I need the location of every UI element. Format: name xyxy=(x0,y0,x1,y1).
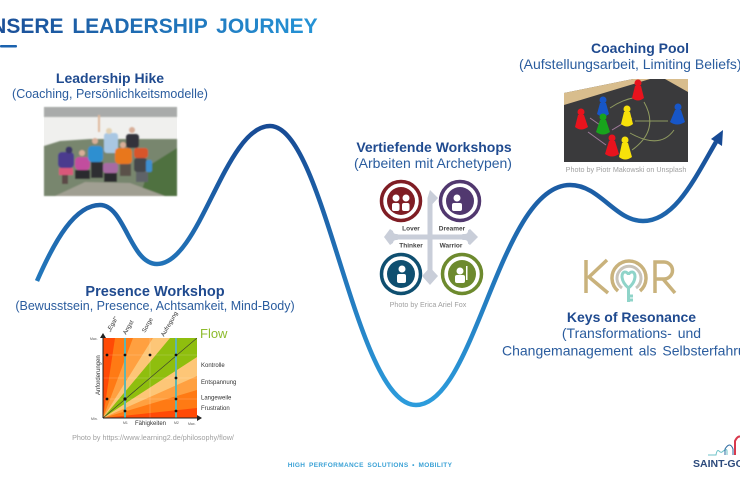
heading: Coaching Pool: Coaching Pool xyxy=(591,40,689,56)
heading: Keys of Resonance: Keys of Resonance xyxy=(567,309,696,325)
label box: Dreamer xyxy=(436,222,468,234)
heading: Leadership Hike: Leadership Hike xyxy=(56,70,164,86)
journey curve arrow xyxy=(37,126,723,405)
logo: Saint-Gobain xyxy=(693,436,740,470)
subtext: Leadership Hike: (Coaching, Persönlichkeitsmodelle) xyxy=(12,87,208,101)
photo: hiking group xyxy=(44,107,177,196)
subtext: Presence Workshop: (Bewusstsein, Presence, Achtsamkeit, Mind-Body) xyxy=(15,299,295,313)
flow chart: „Egal" xyxy=(107,316,120,333)
flow chart: M1 xyxy=(123,421,128,425)
flow chart: Aufregung xyxy=(161,311,180,338)
caption: archetypes: Photo by Erica Ariel Fox xyxy=(390,300,467,309)
flow chart: Fähigkeiten xyxy=(135,421,166,427)
footer tagline: HIGH PERFORMANCE SOLUTIONS • MOBILITY xyxy=(288,462,453,469)
archetype diagram: Warrior xyxy=(440,242,463,250)
flow chart: Frustration xyxy=(201,406,230,412)
flow chart: Anforderungen xyxy=(96,355,102,395)
flow chart: Kontrolle xyxy=(201,363,225,369)
flow chart: Langeweile xyxy=(201,396,232,402)
flow chart: Angst xyxy=(123,319,136,336)
caption: flow chart: Photo by https://www.learning2.de/philosophy/flow/ xyxy=(72,433,234,442)
title underline xyxy=(0,45,17,48)
label box: Warrior xyxy=(436,240,468,251)
icon: Dreamer xyxy=(440,182,480,220)
flow chart: Entspannung xyxy=(201,380,236,386)
archetype diagram xyxy=(382,182,482,294)
flow chart: Sorge xyxy=(142,317,155,334)
caption: game pieces: Photo by Piotr Makowski on Unsplash xyxy=(566,165,686,174)
icon: Lover xyxy=(382,182,420,220)
flow chart: Min. xyxy=(91,417,98,421)
logo: KOR key xyxy=(586,260,675,302)
heading: Vertiefende Workshops: Vertiefende Workshops xyxy=(356,139,512,155)
label box: Thinker xyxy=(393,240,425,251)
flow chart: M2 xyxy=(174,421,179,425)
label box: Lover xyxy=(393,222,425,234)
subtext: Keys of Resonance line 1: (Transformations- und xyxy=(562,325,701,341)
flow chart: Max. xyxy=(188,422,196,426)
archetype diagram: Dreamer xyxy=(439,226,466,232)
heading: Presence Workshop: Presence Workshop xyxy=(85,284,225,300)
photo: game pieces on chalkboard xyxy=(564,79,688,162)
icon: Thinker xyxy=(382,254,420,294)
icon: Warrior xyxy=(442,254,482,294)
subtext: Coaching Pool: (Aufstellungsarbeit, Limiting Beliefs) xyxy=(519,56,740,72)
archetype diagram: Thinker xyxy=(399,242,423,250)
archetype diagram: Lover xyxy=(402,226,420,232)
subtext: Vertiefende Workshops: (Arbeiten mit Archetypen) xyxy=(354,155,512,171)
flow chart: Max. xyxy=(90,337,98,341)
flow chart xyxy=(90,311,236,427)
flow chart: Flow xyxy=(200,326,228,341)
